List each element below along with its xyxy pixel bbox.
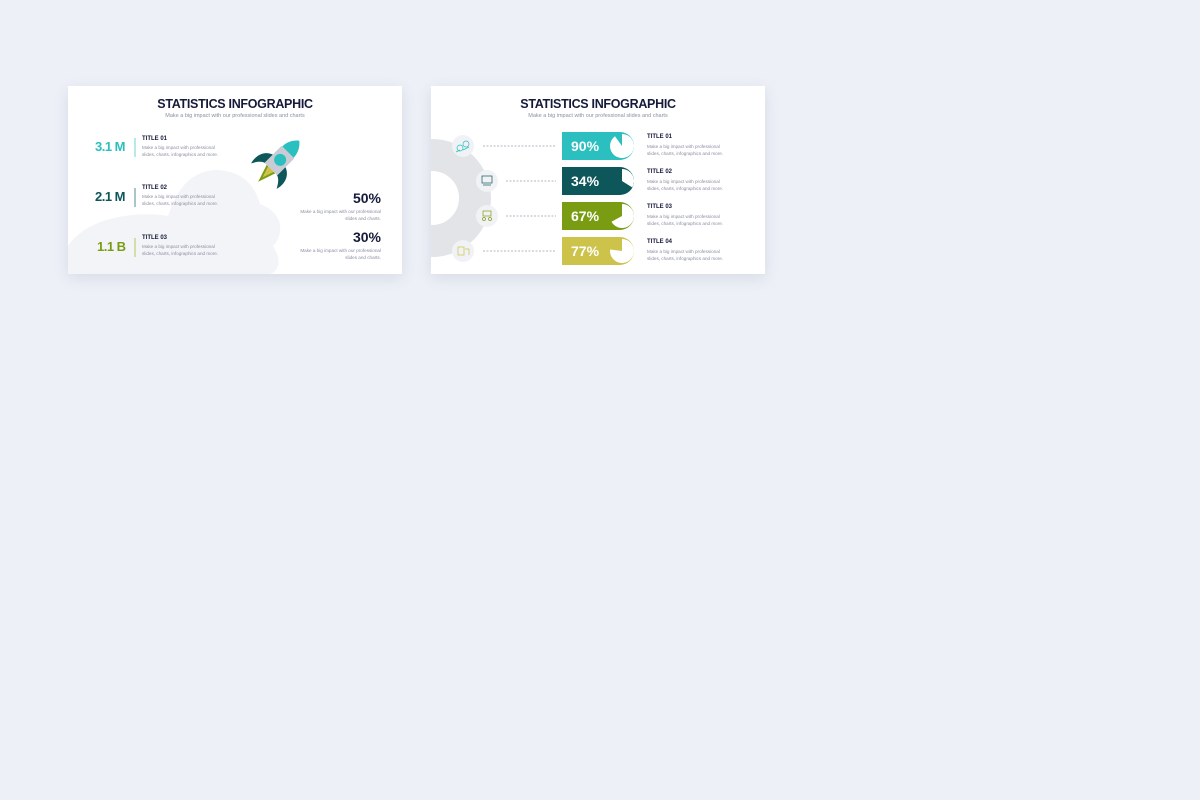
stat 3: TITLE 03 (142, 235, 167, 241)
title: STATISTICS INFOGRAPHIC (157, 97, 313, 111)
cloud background (68, 170, 280, 274)
title: STATISTICS INFOGRAPHIC (520, 97, 676, 111)
bar labels: 67% (571, 208, 599, 224)
text blocks (647, 134, 723, 261)
stat 3: slides, charts, infographics and more. (142, 251, 218, 256)
text blocks: TITLE 02 (647, 169, 672, 175)
panel: slide 1 (68, 86, 402, 274)
row 4 (452, 237, 634, 265)
chart: percentage bars (452, 132, 634, 265)
text blocks: Make a big impact with professional (647, 179, 720, 184)
text blocks: Make a big impact with professional (647, 214, 720, 219)
text blocks: slides, charts, infographics and more. (647, 256, 723, 261)
stat: 30%: slides and charts. (345, 255, 381, 260)
stat: 30%: 30% (353, 229, 381, 245)
panel: slide 2 (431, 86, 765, 274)
subtitle: Make a big impact with our professional slides and charts (528, 113, 668, 119)
stat: 30% (300, 229, 381, 260)
row 2 (476, 167, 634, 195)
text blocks: Make a big impact with professional (647, 144, 720, 149)
bar labels (571, 138, 599, 259)
text blocks: slides, charts, infographics and more. (647, 186, 723, 191)
bar labels: 90% (571, 138, 599, 154)
stat 1: 3.1 M (95, 139, 125, 154)
text blocks: TITLE 03 (647, 204, 672, 210)
text blocks: TITLE 04 (647, 239, 672, 245)
stat: 50%: slides and charts. (345, 216, 381, 221)
stat 2: slides, charts, infographics and more. (142, 201, 218, 206)
stat: 30%: Make a big impact with our professional (300, 248, 381, 253)
row 3 (476, 202, 634, 230)
stat 3 (97, 234, 218, 257)
stat 1: slides, charts, infographics and more. (142, 152, 218, 157)
stat: 50%: 50% (353, 190, 381, 206)
stat 2 (95, 184, 218, 207)
stat 2: TITLE 02 (142, 185, 167, 191)
gray ring (431, 139, 491, 257)
row 1 (452, 132, 634, 160)
stat 1 (95, 136, 218, 157)
stat 3: Make a big impact with professional (142, 244, 215, 249)
text blocks: TITLE 01 (647, 134, 672, 140)
subtitle: Make a big impact with our professional slides and charts (165, 113, 305, 119)
stat 2: 2.1 M (95, 189, 125, 204)
icon: rocket (251, 140, 300, 189)
text blocks: Make a big impact with professional (647, 249, 720, 254)
stat 1: Make a big impact with professional (142, 145, 215, 150)
text blocks: slides, charts, infographics and more. (647, 221, 723, 226)
bar labels: 34% (571, 173, 599, 189)
bar labels: 77% (571, 243, 599, 259)
stat: 50%: Make a big impact with our professional (300, 209, 381, 214)
text blocks: slides, charts, infographics and more. (647, 151, 723, 156)
stat: 50% (300, 190, 381, 221)
stat 3: 1.1 B (97, 239, 126, 254)
stat 2: Make a big impact with professional (142, 194, 215, 199)
stat 1: TITLE 01 (142, 136, 167, 142)
